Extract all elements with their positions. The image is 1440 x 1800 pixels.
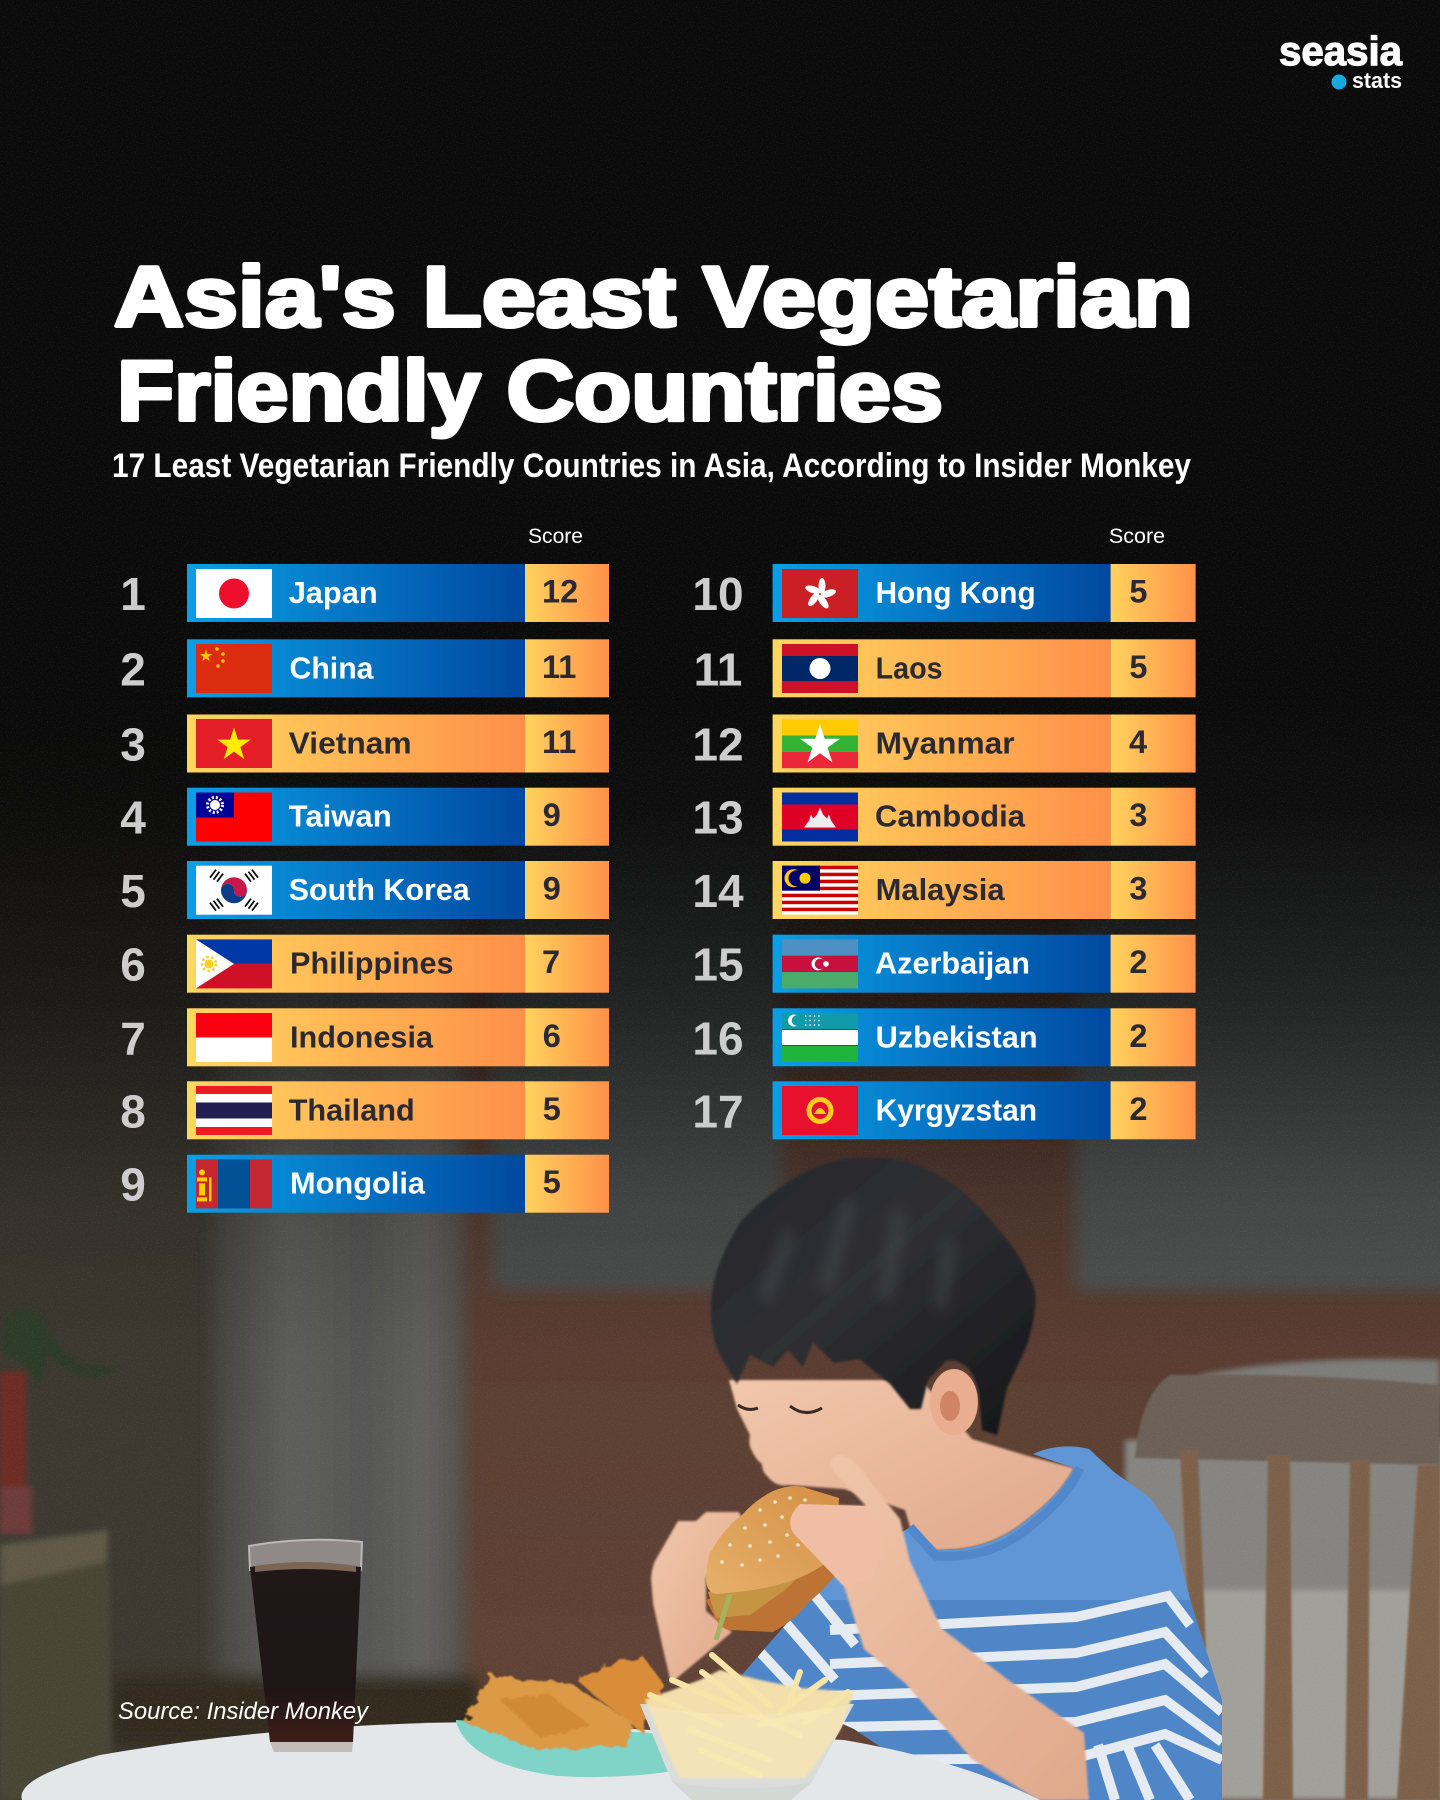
title: Asia's Least Vegetarian (114, 250, 1193, 345)
row 7: Indonesia: 7 (120, 1012, 146, 1064)
shirt with stripes (730, 1446, 1230, 1800)
row 3: Vietnam: 3 (120, 718, 146, 770)
row 2: China: China (290, 650, 374, 685)
row 17: Kyrgyzstan: Kyrgyzstan (876, 1092, 1037, 1127)
row 7: Indonesia (120, 1008, 609, 1066)
row 10: Hong Kong: Hong Kong (876, 575, 1036, 610)
flag: Uzbekistan (782, 1013, 858, 1062)
boy eating burger (651, 1157, 1230, 1800)
row 16: Uzbekistan (692, 1008, 1196, 1066)
row 8: Thailand: 8 (120, 1085, 146, 1137)
title (114, 250, 1193, 439)
row 15: Azerbaijan (692, 935, 1196, 993)
row 12: Myanmar: Myanmar (876, 726, 1015, 760)
row 10: Hong Kong (692, 564, 1196, 622)
flag: China (196, 644, 272, 693)
row 11: Laos: 11 (694, 643, 742, 695)
background photo: room wall, curtain, windows (0, 700, 1440, 1800)
right hand fingers over burger (790, 1504, 884, 1586)
ear (930, 1369, 978, 1435)
row 9: Mongolia (120, 1155, 609, 1213)
flag: Cambodia (782, 792, 858, 842)
flag: Indonesia (196, 1013, 272, 1062)
row 1: Japan: Japan (289, 575, 378, 610)
row 10: Hong Kong: 5 (1129, 574, 1147, 610)
row 14: Malaysia: Malaysia (876, 872, 1005, 907)
flag: Taiwan (196, 792, 272, 842)
row 15: Azerbaijan: 2 (1129, 944, 1147, 980)
row 11: Laos (694, 639, 1196, 697)
row 6: Philippines: 6 (120, 939, 146, 991)
row 2: China: 11 (542, 649, 576, 685)
flag: Azerbaijan (782, 939, 858, 988)
row 10: Hong Kong: 10 (692, 568, 744, 620)
flag: Vietnam (196, 719, 272, 768)
title: Friendly Countries (117, 344, 943, 439)
flag: Laos (782, 644, 858, 693)
flag: South Korea (196, 866, 272, 915)
score header right: Score (1109, 525, 1165, 548)
row 1: Japan: 1 (120, 568, 146, 620)
row 14: Malaysia: 3 (1129, 870, 1147, 906)
flag: Kyrgyzstan (782, 1086, 858, 1135)
burger (706, 1486, 842, 1640)
row 16: Uzbekistan: Uzbekistan (876, 1019, 1038, 1054)
hair sheen (765, 1200, 950, 1310)
row 6: Philippines: Philippines (290, 946, 454, 981)
neck and face (729, 1380, 1074, 1550)
row 16: Uzbekistan: 16 (692, 1012, 744, 1064)
logo: seasia stats: seasia (1279, 28, 1403, 74)
chair and sofa behind the boy (1125, 1359, 1440, 1800)
row 9: Mongolia: 9 (120, 1159, 146, 1211)
row 13: Cambodia: 3 (1129, 797, 1147, 833)
row 2: China: 2 (120, 643, 146, 695)
arm and hand (789, 1455, 1089, 1800)
row 12: Myanmar (692, 714, 1196, 772)
row 8: Thailand (120, 1081, 609, 1139)
logo: seasia stats: stats (1352, 68, 1402, 93)
row 3: Vietnam (120, 714, 609, 772)
plate and fried chicken (456, 1656, 680, 1777)
row 4: Taiwan: Taiwan (289, 799, 392, 834)
flag: Myanmar (782, 719, 858, 768)
row 4: Taiwan: 9 (543, 797, 561, 833)
row 9: Mongolia: 5 (543, 1164, 561, 1200)
left room detail: plant, red frame, cabinet (0, 1309, 118, 1800)
row 14: Malaysia: 14 (692, 865, 744, 917)
score header left: Score (528, 525, 583, 548)
flag: Japan (196, 569, 272, 618)
row 7: Indonesia: Indonesia (290, 1019, 434, 1054)
row 2: China (120, 639, 609, 697)
row 5: South Korea: 9 (543, 870, 561, 906)
row 6: Philippines (120, 935, 609, 993)
row 3: Vietnam: 11 (542, 724, 576, 760)
row 1: Japan (120, 564, 609, 622)
row 6: Philippines: 7 (542, 944, 560, 980)
row 17: Kyrgyzstan: 2 (1129, 1091, 1147, 1127)
cola glass (249, 1540, 362, 1752)
flag: Hong Kong (782, 569, 858, 618)
row 17: Kyrgyzstan (692, 1081, 1196, 1139)
row 17: Kyrgyzstan: 17 (692, 1085, 744, 1137)
inner ear shade (940, 1391, 960, 1421)
row 5: South Korea: 5 (120, 865, 146, 917)
row 5: South Korea (120, 861, 609, 919)
row 15: Azerbaijan: Azerbaijan (875, 946, 1030, 981)
row 5: South Korea: South Korea (289, 872, 470, 907)
row 3: Vietnam: Vietnam (289, 726, 412, 760)
table (21, 1722, 1040, 1800)
left hand (651, 1512, 742, 1683)
row 12: Myanmar: 12 (692, 718, 744, 770)
row 4: Taiwan: 4 (120, 792, 146, 844)
fries in glass bowl (640, 1655, 854, 1800)
source note: Source: Insider Monkey (118, 1698, 370, 1725)
hair (711, 1157, 1036, 1435)
row 13: Cambodia: 13 (692, 792, 744, 844)
flag: Mongolia (196, 1159, 272, 1208)
eye lashes (738, 1405, 822, 1413)
flag: Thailand (196, 1086, 272, 1135)
row 11: Laos: 5 (1129, 649, 1147, 685)
flag: Malaysia (782, 866, 858, 915)
row 9: Mongolia: Mongolia (290, 1166, 426, 1201)
row 8: Thailand: Thailand (289, 1092, 415, 1127)
row 14: Malaysia (692, 861, 1196, 919)
row 16: Uzbekistan: 2 (1129, 1018, 1147, 1054)
row 13: Cambodia (692, 788, 1196, 846)
row 15: Azerbaijan: 15 (692, 939, 744, 991)
row 12: Myanmar: 4 (1129, 724, 1147, 760)
row 13: Cambodia: Cambodia (875, 799, 1026, 834)
row 8: Thailand: 5 (543, 1091, 561, 1127)
subtitle: 17 Least Vegetarian Friendly Countries in Asia, According to Insider Monkey (112, 447, 1191, 485)
row 11: Laos: Laos (876, 650, 943, 685)
flag: Philippines (196, 939, 272, 988)
row 7: Indonesia: 6 (543, 1018, 561, 1054)
row 1: Japan: 12 (542, 574, 578, 610)
row 4: Taiwan (120, 788, 609, 846)
